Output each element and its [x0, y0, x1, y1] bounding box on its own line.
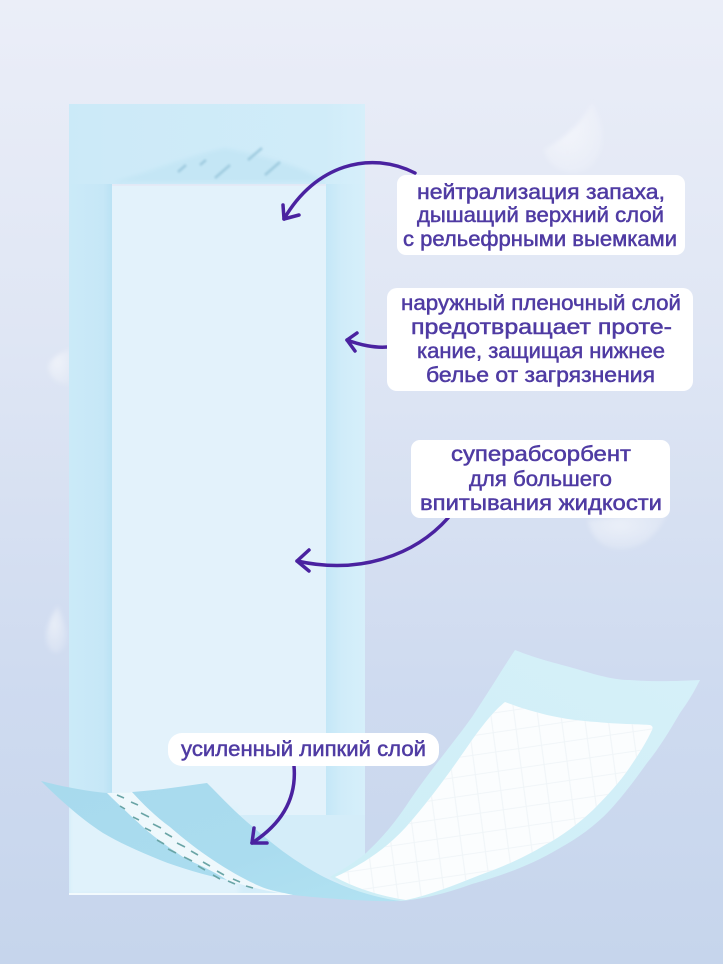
pad bottom fold [238, 815, 336, 893]
arrow: to film layer [347, 333, 387, 351]
callout: odour neutralisation: с рельефрными выемками [403, 228, 677, 251]
callout: odour neutralisation: дышащий верхний слой [417, 204, 664, 227]
pad top fold [104, 104, 333, 184]
callout: adhesive layer [168, 733, 439, 766]
callout: outer film layer: предотвращает проте- [411, 316, 672, 339]
callout: adhesive layer: усиленный липкий слой [181, 738, 426, 761]
callout: odour neutralisation: нейтрализация запаха, [417, 181, 665, 204]
curled pad wing [41, 650, 700, 901]
callout: outer film layer: наружный пленочный слой [401, 292, 681, 315]
callout: outer film layer [387, 288, 693, 391]
callout: superabsorbent: для большего [469, 468, 612, 491]
callout: outer film layer: кание, защищая нижнее [417, 340, 665, 363]
callout: odour neutralisation [397, 175, 685, 255]
callout: outer film layer: белье от загрязнения [426, 364, 655, 387]
arrow: to top layer [283, 163, 415, 219]
curled pad white quilted surface [335, 702, 653, 900]
decorative water drops [46, 102, 668, 653]
flat pad [69, 104, 365, 895]
callout: superabsorbent: суперабсорбент [451, 443, 631, 466]
callout: superabsorbent [411, 440, 670, 518]
adhesive backing flap [41, 781, 400, 901]
arrow: to superabsorbent [297, 518, 448, 571]
callout: superabsorbent: впитывания жидкости [420, 492, 662, 515]
arrow: to adhesive layer [252, 766, 294, 843]
pad absorbent core [112, 186, 326, 818]
adhesive strip [107, 792, 293, 895]
